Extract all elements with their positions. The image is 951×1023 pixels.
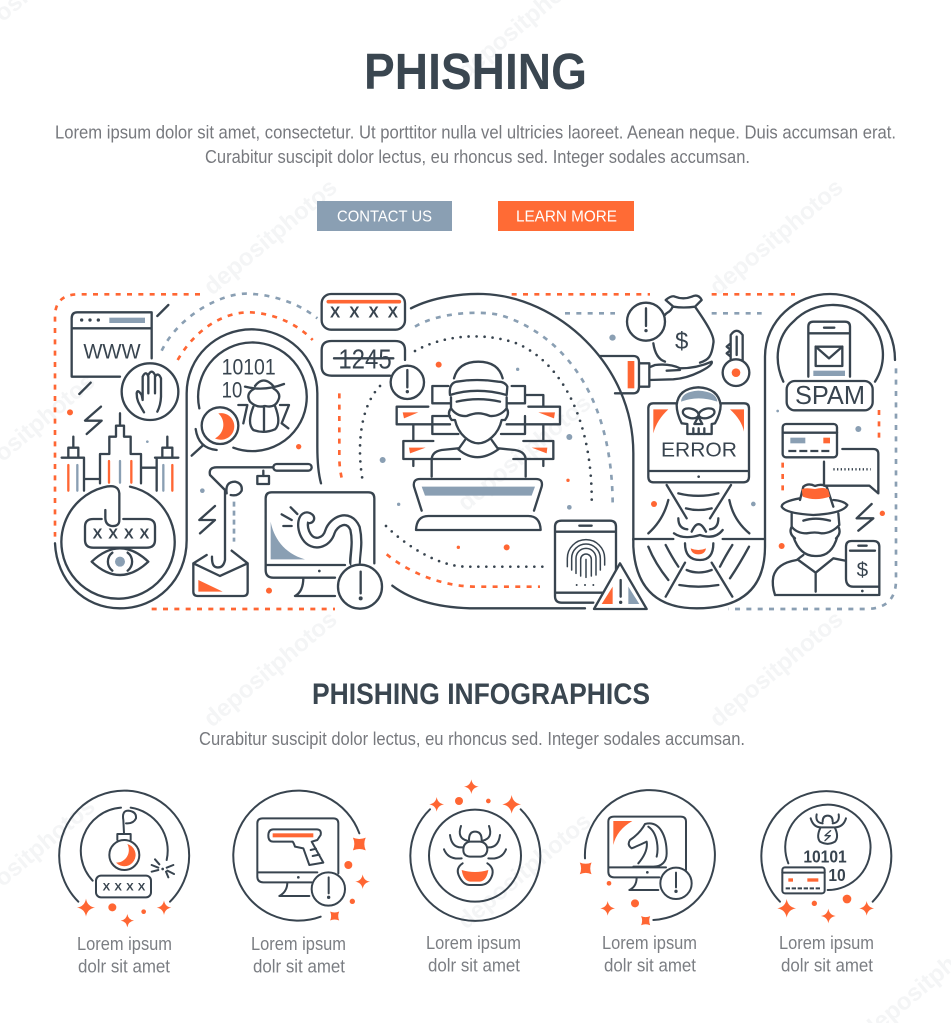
icon: spider in circle	[410, 779, 540, 921]
icon label 2: Lorem ipsum	[251, 934, 346, 954]
password box: XXXX	[330, 304, 399, 321]
icon: bomb and password: XXXX	[103, 882, 146, 894]
dashed route: gray arc	[162, 294, 317, 351]
icon: browser window	[72, 305, 168, 394]
blob outline	[55, 329, 321, 608]
icon: lightning	[857, 504, 873, 531]
icons row right	[410, 779, 891, 925]
button: contact us	[317, 201, 452, 231]
icon: alert	[391, 366, 424, 399]
dashed route: orange vertical	[339, 393, 343, 482]
icon: man in hat	[773, 484, 878, 595]
icon label 3: dolr sit amet	[428, 956, 520, 976]
icon: phone with dollar	[846, 541, 879, 595]
icon: bug, binary and card	[761, 791, 891, 923]
speech bubble	[824, 449, 878, 493]
title: PHISHING	[364, 43, 587, 100]
icon: phone with spam: SPAM	[795, 380, 865, 410]
watermark: depositphotos	[453, 390, 597, 517]
icon label 3: Lorem ipsum	[426, 933, 521, 953]
dashed route: top gray	[565, 309, 615, 317]
watermark: depositphotos	[705, 606, 849, 733]
icon label 4: dolr sit amet	[604, 956, 696, 976]
dashed route: bottom orange	[152, 605, 335, 613]
upper arc	[411, 294, 633, 540]
dashed route: orange short verticals	[783, 410, 879, 497]
icon label 1: dolr sit amet	[78, 956, 170, 976]
watermark: depositphotos	[705, 174, 849, 301]
icon: money bag on hand: $	[675, 328, 688, 355]
password box	[322, 294, 405, 330]
warning triangle	[594, 563, 647, 609]
hacker at brick wall	[397, 362, 560, 530]
icon label 5	[779, 933, 874, 976]
main illustration right part	[600, 294, 896, 609]
icon: eye and password hook: XXXX	[93, 526, 150, 542]
icon: credit card	[783, 424, 837, 457]
icon: money bag on hand	[600, 296, 714, 393]
watermark: depositphotos	[199, 606, 343, 733]
button: contact us: CONTACT US	[337, 208, 432, 226]
icon: bug, binary and card: 10	[828, 865, 846, 885]
icon: phone with spam	[778, 305, 883, 410]
icon label 4	[602, 933, 697, 976]
icon: bug under magnifier: 10101	[222, 354, 276, 379]
icon: error monitor with skull	[648, 387, 749, 482]
dashed route: top orange	[512, 290, 650, 298]
icon: gun on monitor	[233, 791, 370, 921]
dotted arcs	[360, 336, 592, 567]
dashed route: top right orange	[712, 290, 795, 298]
icon label 2: dolr sit amet	[253, 956, 345, 976]
icon label 2	[251, 934, 346, 976]
icon: browser window: WWW	[83, 339, 141, 363]
section subtitle: Curabitur suscipit dolor lectus, eu rhoncus sed. Integer sodales accumsan.	[199, 729, 745, 749]
icon: monitor with worm	[266, 492, 382, 609]
icon: bug under magnifier: 10	[222, 377, 242, 402]
dashed route: lower orange	[387, 554, 540, 587]
icon label 1	[77, 934, 172, 976]
icon: city buildings	[62, 413, 178, 491]
lower arc	[392, 586, 585, 608]
icon: spider on web	[633, 485, 765, 597]
section heading: PHISHING INFOGRAPHICS	[312, 678, 650, 711]
icon: bug, binary and card: 10101	[803, 846, 847, 866]
icon: fishing rod and envelope	[193, 464, 312, 596]
icon: bomb and password	[59, 791, 189, 927]
icon: eye and password hook	[61, 486, 175, 599]
icons row left	[59, 791, 370, 927]
icon label 3	[426, 933, 521, 976]
intro text: Lorem ipsum dolor sit amet, consectetur. Ut porttitor nulla vel ultricies laoreet. Aenean neque. Duis accumsan erat.	[55, 122, 896, 142]
button: learn more: LEARN MORE	[516, 208, 617, 226]
icon label 4: Lorem ipsum	[602, 933, 697, 953]
tablet with fingerprint	[555, 521, 616, 603]
watermark: depositphotos	[453, 808, 597, 935]
button: learn more	[498, 201, 634, 231]
main illustration center part	[322, 294, 650, 609]
icon: phone with dollar: $	[857, 559, 869, 582]
dashed route: orange arc	[178, 312, 313, 360]
icon: error monitor with skull: ERROR	[661, 439, 737, 462]
dashed route: inner gray arc	[415, 313, 613, 503]
icon: trojan horse on monitor	[580, 790, 715, 925]
intro text: Curabitur suscipit dolor lectus, eu rhoncus sed. Integer sodales accumsan.	[205, 147, 750, 167]
accent dots	[609, 335, 885, 549]
main illustration left part	[55, 294, 382, 609]
accent dots	[380, 335, 616, 550]
icon label 5: dolr sit amet	[781, 956, 873, 976]
icon: lightning	[85, 407, 102, 434]
dashed route: top right gray	[712, 309, 762, 317]
icon label 1: Lorem ipsum	[77, 934, 172, 954]
icon: key	[723, 331, 749, 386]
watermark: depositphotos	[199, 174, 343, 301]
icon label 5: Lorem ipsum	[779, 933, 874, 953]
intro text	[55, 122, 896, 167]
central capsule outline	[633, 294, 895, 608]
dashed route: outer orange	[55, 294, 200, 537]
icon: bug under magnifier	[192, 342, 307, 456]
icon: stop hand	[122, 363, 178, 420]
crossed-out PIN box	[322, 341, 405, 376]
crossed-out PIN box: 1245	[338, 343, 392, 374]
accent dots	[67, 409, 301, 594]
dashed route: right gray	[728, 368, 896, 609]
